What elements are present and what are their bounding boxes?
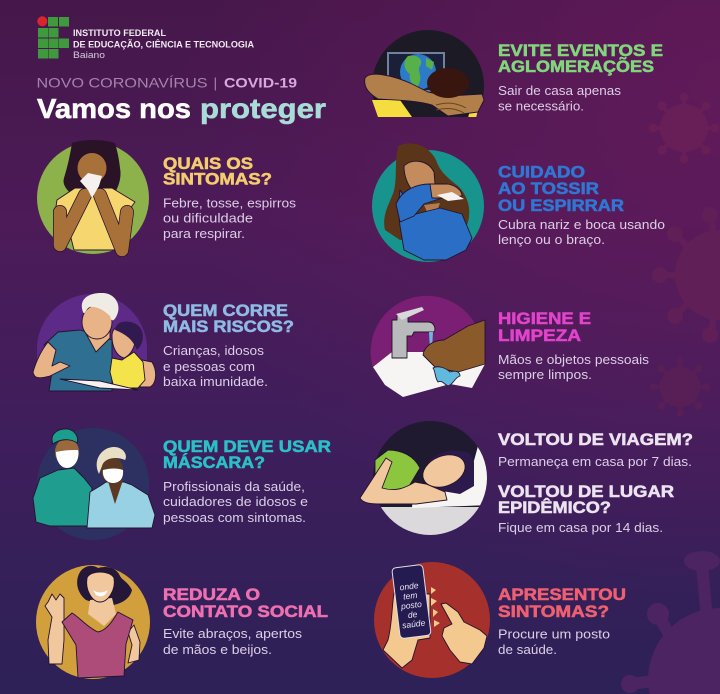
text: quem corre mais riscos: e pessoas com: [163, 359, 255, 374]
text: quem deve usar mascara: MÁSCARA?: [163, 453, 265, 472]
text: cuidado ao tossir: Cubra nariz e boca usando: [498, 217, 665, 232]
text: cuidado ao tossir: AO TOSSIR: [498, 180, 599, 198]
text: quem deve usar mascara: [163, 438, 331, 525]
subtitle: |: [214, 74, 217, 90]
text: higiene e limpeza: LIMPEZA: [498, 327, 581, 345]
text: quais os sintomas: SINTOMAS?: [163, 170, 272, 188]
text: reduza o contato social: REDUZA O: [163, 586, 260, 604]
panel: eventos: [364, 30, 663, 117]
text: apresentou sintomas: Procure um posto: [498, 626, 610, 642]
text: higiene e limpeza: HIGIENE E: [498, 310, 591, 328]
text: cuidado ao tossir: [498, 164, 665, 247]
text: quem corre mais riscos: MAIS RISCOS?: [163, 318, 294, 336]
icon: phone in hands: de: [407, 609, 418, 620]
text: higiene e limpeza: [498, 310, 650, 382]
text: quais os sintomas: para respirar.: [163, 226, 245, 241]
subtitle: [36, 74, 297, 90]
icon: phone in hands: onde: [399, 580, 419, 592]
logo text: Baiano: [73, 50, 105, 61]
logo text: [73, 28, 254, 61]
text: evite eventos: EVITE EVENTOS E: [498, 42, 663, 60]
text: higiene e limpeza: sempre limpos.: [498, 367, 592, 382]
text: quais os sintomas: QUAIS OS: [163, 155, 253, 173]
text: voltou de viagem: [498, 431, 693, 469]
panel: riscos: [33, 293, 294, 391]
main heading: Vamos nos: [37, 93, 191, 124]
panel: viagem: [360, 420, 693, 540]
text: apresentou sintomas: de saúde.: [498, 642, 557, 657]
text: voltou de lugar epidemico: Fique em casa por 14 dias.: [498, 520, 663, 535]
text: reduza o contato social: Evite abraços, apertos: [163, 626, 303, 641]
text: higiene e limpeza: Mãos e objetos pessoais: [498, 352, 650, 367]
icon: washing hands: [371, 296, 485, 397]
text: quem corre mais riscos: QUEM CORRE: [163, 302, 288, 320]
text: voltou de lugar epidemico: [498, 483, 674, 535]
panel: sintomas: [37, 140, 297, 254]
text: quem deve usar mascara: Profissionais da saúde,: [163, 479, 305, 494]
text: quem deve usar mascara: cuidadores de idosos e: [163, 494, 308, 509]
text: voltou de viagem: VOLTOU DE VIAGEM?: [498, 431, 693, 449]
main heading: proteger: [200, 93, 326, 124]
text: voltou de lugar epidemico: EPIDÊMICO?: [498, 498, 611, 517]
text: quais os sintomas: [163, 155, 297, 241]
panel: apresentou sintomas: [374, 562, 626, 678]
panel: mascara: [33, 428, 331, 540]
text: evite eventos: Sair de casa apenas: [498, 83, 622, 98]
icon: person resting in bed: [360, 420, 490, 540]
text: cuidado ao tossir: lenço ou o braço.: [498, 232, 605, 247]
panel: contato social: [36, 565, 328, 679]
icon: woman waving: [36, 565, 150, 679]
text: quem corre mais riscos: [163, 302, 294, 389]
text: evite eventos: se necessário.: [498, 98, 584, 114]
text: reduza o contato social: de mãos e beijos.: [163, 642, 272, 657]
main heading: [37, 93, 326, 124]
text: voltou de lugar epidemico: VOLTOU DE LUGAR: [498, 483, 674, 501]
icon: phone in hands: [374, 562, 490, 678]
text: quem corre mais riscos: Crianças, idosos: [163, 343, 265, 358]
panel: tossir: [372, 143, 665, 262]
text: evite eventos: [498, 42, 663, 114]
text: quais os sintomas: ou dificuldade: [163, 210, 253, 226]
icon: phone in hands: tem: [403, 590, 418, 601]
text: quem corre mais riscos: baixa imunidade.: [163, 374, 268, 389]
text: voltou de viagem: Permaneça em casa por 7 dias.: [498, 454, 692, 469]
icon: phone in hands: posto: [399, 599, 423, 611]
logo text: DE EDUCAÇÃO, CIÊNCIA E TECNOLOGIA: [73, 38, 254, 50]
text: apresentou sintomas: APRESENTOU: [498, 586, 626, 604]
logo: Instituto Federal Baiano: [37, 16, 254, 61]
text: quais os sintomas: Febre, tosse, espirros: [163, 196, 297, 210]
title block: [36, 74, 326, 124]
icon: nurse and elder with masks: [33, 428, 155, 540]
icon: woman sneezing: [37, 140, 149, 254]
icon: person watching tv: [364, 30, 484, 117]
text: apresentou sintomas: SINTOMAS?: [498, 603, 609, 621]
text: reduza o contato social: CONTATO SOCIAL: [163, 603, 328, 621]
text: cuidado ao tossir: OU ESPIRRAR: [498, 197, 624, 215]
text: quem deve usar mascara: pessoas com sintomas.: [163, 510, 306, 525]
logo text: INSTITUTO FEDERAL: [73, 28, 166, 38]
background viruses: [621, 92, 720, 694]
text: quem deve usar mascara: QUEM DEVE USAR: [163, 438, 331, 456]
text: apresentou sintomas: [498, 586, 626, 657]
panel: higiene: [371, 296, 650, 397]
text: cuidado ao tossir: CUIDADO: [498, 164, 585, 182]
icon: grandmother and child: [33, 293, 156, 391]
icon: phone in hands: saúde: [402, 618, 426, 630]
text: evite eventos: AGLOMERAÇÕES: [498, 56, 654, 76]
logo mark: [37, 16, 69, 58]
icon: person coughing into elbow: [372, 143, 484, 262]
subtitle: NOVO CORONAVÍRUS: [36, 74, 208, 90]
subtitle: COVID-19: [224, 74, 297, 90]
text: reduza o contato social: [163, 586, 328, 657]
